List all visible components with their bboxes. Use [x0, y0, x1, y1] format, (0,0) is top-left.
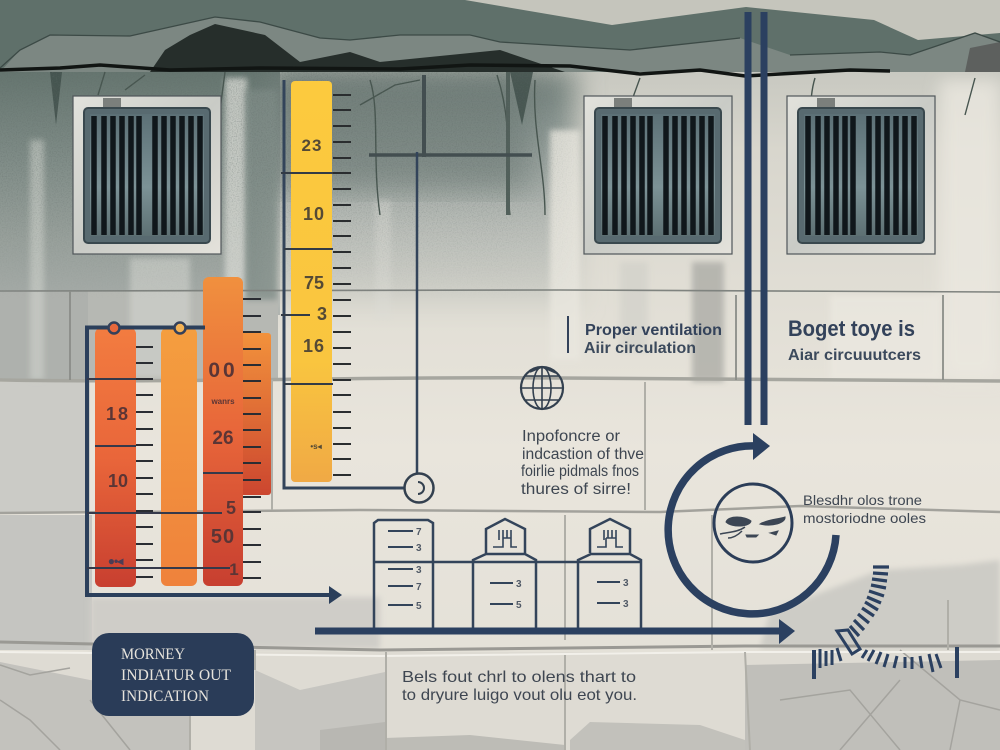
stack numbers: 5: [516, 600, 522, 611]
heading: proper ventilation: Aiir circulation: [584, 340, 696, 357]
gauge lines: [281, 173, 333, 384]
small building diagrams: [374, 519, 641, 628]
gauge numbers: 3: [317, 304, 327, 324]
text: importance: Inpofoncre or: [522, 428, 620, 445]
heading: proper ventilation: Proper ventilation: [585, 322, 722, 339]
yellow gauge: [281, 80, 405, 488]
mortar joints: [0, 290, 1000, 750]
text: importance: thures of sirre!: [521, 481, 631, 498]
chart numbers: ●•◂: [108, 554, 124, 568]
gauge numbers: 10: [303, 204, 325, 224]
chart numbers: 1: [229, 560, 239, 579]
stack numbers: 7: [416, 582, 422, 593]
text: circle note: Blesdhr olos trone: [803, 492, 922, 508]
callout panel: INDICATION: [121, 688, 209, 705]
text: importance: foirlie pidmals fnos: [521, 463, 639, 480]
scale lines: [87, 379, 243, 568]
connector with round node: [369, 75, 532, 502]
stack numbers: 3: [623, 599, 629, 610]
gauge numbers: 75: [304, 273, 324, 293]
icon: circle with debris: [714, 484, 792, 562]
footer text: Bels fout chrl to olens thart to: [402, 669, 636, 686]
callout panel: INDIATUR OUT: [121, 667, 232, 684]
heading: budget: [788, 316, 921, 364]
chart numbers: 00: [208, 359, 238, 382]
stack numbers: 3: [623, 578, 629, 589]
stack numbers: 3: [416, 565, 422, 576]
circular arrow: [668, 433, 836, 614]
plaster grain: [0, 72, 572, 272]
callout panel: MORNEY: [121, 646, 185, 663]
bar two: [161, 328, 197, 586]
fist icon middle: [493, 530, 517, 547]
gauge bar: [291, 81, 332, 482]
vent: right: [787, 96, 935, 254]
back bar: [235, 333, 271, 495]
text: importance: indcastion of thve: [522, 446, 644, 463]
gauge numbers: 16: [303, 336, 325, 356]
vent: centre: [584, 96, 732, 254]
orange bar chart: [87, 277, 342, 604]
chart numbers: 50: [211, 526, 235, 548]
chart numbers: 18: [106, 404, 130, 424]
round node: [404, 474, 434, 502]
chart numbers: 10: [108, 471, 128, 491]
gauge numbers: •s◂: [310, 442, 323, 451]
gauge frame: [284, 80, 405, 488]
bar three: [203, 277, 243, 586]
stack numbers: 3: [416, 543, 422, 554]
bar one: [95, 328, 136, 587]
chart numbers: wanrs: [210, 397, 235, 406]
text: circle note: mostoriodne ooles: [803, 510, 926, 526]
bottom stones: [0, 652, 1000, 750]
chart axes: [87, 328, 332, 595]
lower wall shadows: [760, 560, 1000, 650]
right unit: [578, 519, 641, 628]
heading: proper ventilation: [568, 316, 722, 357]
stack numbers: [416, 527, 629, 612]
chart numbers: 26: [212, 428, 234, 449]
chart numbers: [106, 359, 239, 579]
gauge numbers: 23: [302, 136, 322, 155]
streaks under and around the vents: [225, 78, 247, 298]
icon: globe: [521, 367, 563, 409]
heading: budget: Boget toye is: [788, 316, 915, 341]
text: circle note: [803, 492, 926, 526]
marker dots: [108, 322, 186, 334]
stack numbers: 5: [416, 601, 422, 612]
middle unit: [473, 519, 536, 628]
stack dashes: [388, 531, 620, 605]
callout panel: [92, 633, 254, 716]
cracked top of wall: [0, 0, 1000, 215]
heading: budget: Aiar circuuutcers: [788, 347, 921, 364]
vent: left: [73, 96, 221, 254]
axis arrow: [329, 586, 342, 604]
shared rail: [374, 561, 640, 563]
gauge numbers: [302, 136, 327, 451]
footer text: to dryure luigo vout olu eot you.: [402, 687, 637, 704]
fist icon right: [597, 530, 623, 547]
long arrow: [315, 619, 795, 644]
chart numbers: 5: [226, 498, 236, 518]
vertical double pipe: [748, 12, 764, 425]
footer text: [402, 669, 637, 704]
gauge ticks: [333, 95, 351, 475]
drips: [50, 72, 533, 125]
text: importance: [521, 428, 644, 498]
stack numbers: 7: [416, 527, 422, 538]
stack numbers: 3: [516, 579, 522, 590]
tall stack: [374, 520, 433, 628]
scale ticks: [136, 299, 261, 578]
dashed arc gauge: [814, 567, 957, 679]
